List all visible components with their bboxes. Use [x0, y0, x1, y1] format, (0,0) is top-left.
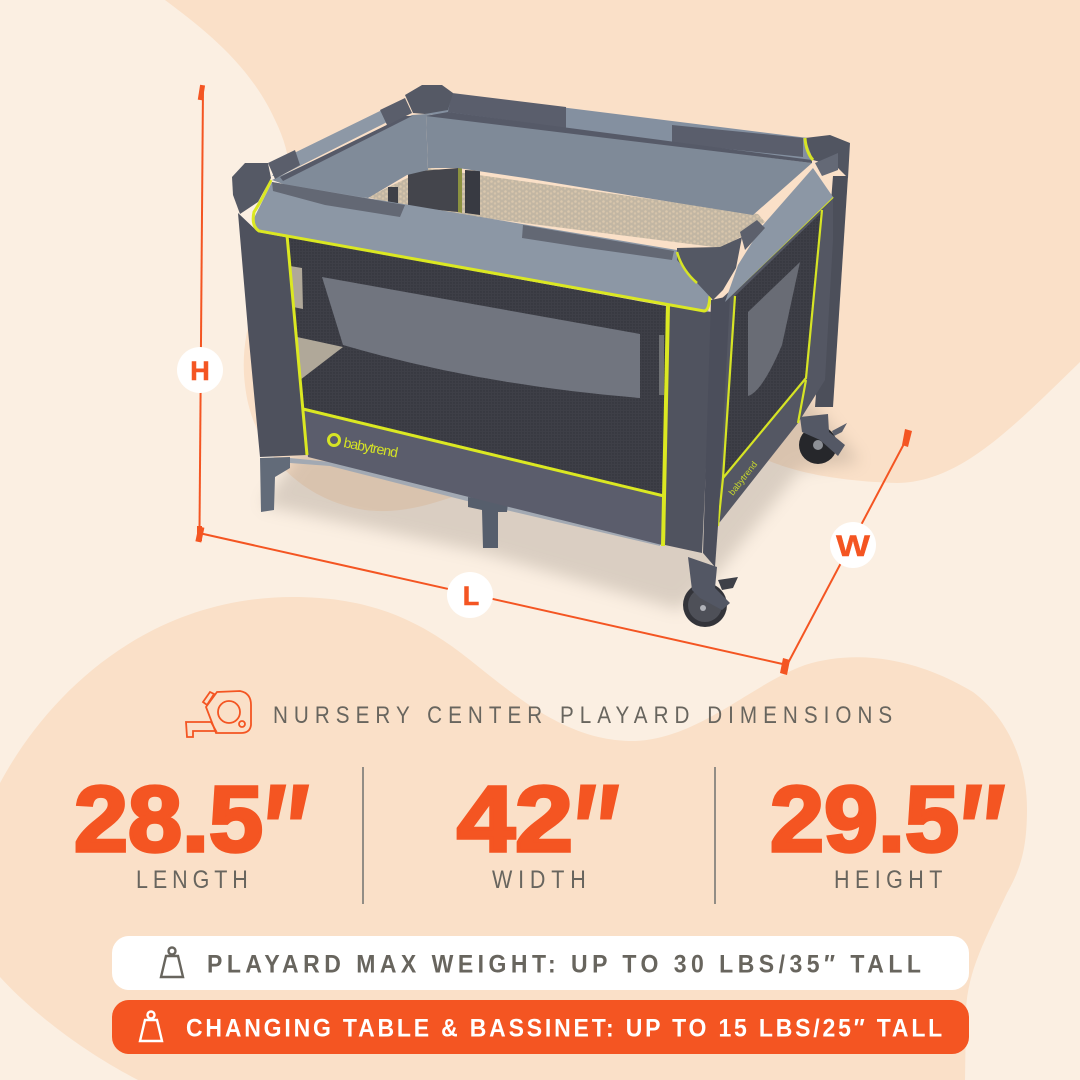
- stat divider: [714, 767, 716, 904]
- background blob: bottom: [0, 597, 1027, 1080]
- corner clip: [740, 220, 765, 250]
- right panel logo: babytrend: [727, 460, 759, 497]
- mesh through-view mattress: [322, 277, 640, 398]
- icon: weight: [161, 948, 183, 977]
- back rim: [426, 93, 812, 163]
- front rim handles: [272, 182, 674, 260]
- dimension badge: H: [177, 347, 223, 393]
- dimension badge: W: W: [836, 530, 871, 563]
- front mesh yellow trim: [287, 235, 664, 496]
- stat: length: ″: [264, 757, 310, 903]
- front rim fabric: [253, 182, 711, 312]
- lime accent at right corner: [677, 252, 697, 283]
- back wheel: [799, 414, 847, 464]
- pill text: CHANGING TABLE & BASSINET: UP TO 15 LBS/25″ TALL: [186, 1015, 942, 1043]
- stat divider: [362, 767, 364, 904]
- brand logo on front panel: babytrend: [342, 434, 399, 460]
- back window frame: [388, 168, 480, 215]
- lime accent on back right corner: [805, 138, 813, 160]
- left inner wall: [272, 114, 428, 198]
- stat: length: LENGTH: [136, 865, 248, 893]
- floor shadow: [262, 400, 860, 610]
- stat: width: 42: [457, 767, 573, 871]
- stat: length: [74, 757, 310, 903]
- stat: height: ″: [960, 757, 1006, 903]
- center leg: [468, 497, 508, 548]
- inner back wall: [426, 114, 812, 215]
- right rim clip: [815, 153, 838, 176]
- stat: width: ″: [574, 757, 620, 903]
- playard product illustration: [232, 85, 860, 627]
- dimension line: length: [195, 527, 787, 665]
- front left post: [238, 213, 307, 457]
- background blob: top: [165, 0, 1080, 511]
- right side panel: [716, 197, 833, 527]
- frame rail: [290, 458, 660, 546]
- front yellow strip on post: [663, 305, 668, 546]
- back left corner: [405, 85, 453, 114]
- pill: changing table and bassinet: [112, 1000, 969, 1054]
- front panel lower band: [303, 410, 664, 545]
- stat: width: WIDTH: [492, 865, 586, 893]
- front right post panel: [665, 306, 712, 553]
- dimension badge: L: L: [463, 581, 479, 611]
- stat: height: 29.5: [770, 767, 959, 871]
- stat: height: [770, 757, 1006, 903]
- front mesh: [288, 237, 666, 495]
- front rim lime piping: [253, 180, 710, 311]
- stat: length: 28.5: [74, 767, 263, 871]
- dimension badge: H: H: [190, 356, 210, 386]
- stat: height: HEIGHT: [834, 865, 942, 893]
- left leg: [260, 457, 290, 512]
- pill: playard max weight: [112, 936, 969, 990]
- right panel trim: [718, 197, 833, 526]
- dimension line: height: [197, 85, 205, 541]
- right mesh mattress: [748, 262, 800, 396]
- dimension badge: W: [830, 522, 876, 568]
- left rim outer: [268, 98, 412, 181]
- right mesh: [723, 212, 822, 477]
- icon: weight: [140, 1012, 162, 1041]
- mesh through-view beige: [290, 266, 343, 380]
- mesh right sliver: [659, 335, 664, 395]
- front wheel: [683, 557, 738, 627]
- right rim fabric: [725, 168, 833, 302]
- back post: [815, 176, 848, 407]
- dimension line: width: [780, 429, 912, 675]
- post highlight: [703, 296, 730, 567]
- mattress floor: [368, 168, 765, 248]
- section heading: NURSERY CENTER PLAYARD DIMENSIONS: [273, 702, 892, 728]
- dimension badge: L: [447, 572, 493, 618]
- icon: tape measure: [186, 691, 251, 737]
- stat: width: [457, 757, 620, 903]
- front right corner: [677, 237, 742, 300]
- back right corner: [805, 135, 850, 178]
- pill text: PLAYARD MAX WEIGHT: UP TO 30 LBS/35″ TALL: [207, 951, 921, 979]
- left front corner: [232, 163, 271, 214]
